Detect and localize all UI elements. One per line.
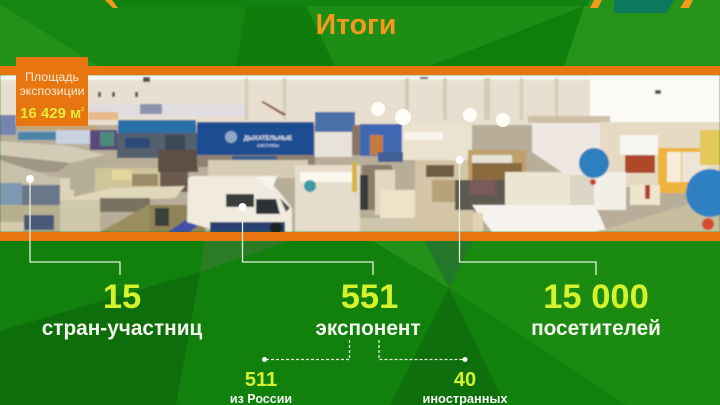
left upper booths: [88, 104, 245, 116]
stat: exhibitors: [315, 278, 421, 340]
right of centre: [415, 160, 473, 232]
sub-stat: from Russia: [230, 369, 292, 405]
title: Итоги: [316, 9, 396, 41]
banner: breathing systems: ДЫХАТЕЛЬНЫЕ: [244, 136, 292, 142]
stat: visitors: [531, 278, 661, 340]
balloons: [579, 148, 609, 178]
badge: exhibition area: [16, 57, 88, 126]
number 551: 551: [341, 278, 398, 316]
orange bars: [0, 66, 720, 75]
number 15 000: 15 000: [543, 278, 649, 316]
van: [187, 176, 292, 234]
stat: countries: [42, 278, 202, 340]
number 40: 40: [454, 369, 476, 391]
banner: breathing systems: системы: [257, 143, 279, 149]
badge value: 16 429 м2: [20, 105, 84, 122]
Rostelecom booth: [295, 162, 360, 232]
left booth rows: [0, 141, 105, 163]
sub-stat: foreign: [422, 369, 508, 405]
label countries: стран-участниц: [42, 317, 202, 340]
badge label: экспозиции: [19, 84, 85, 98]
right booths: [600, 122, 720, 187]
badge label: Площадь: [25, 70, 79, 84]
photo: exhibition hall: [0, 75, 720, 232]
banner: breathing systems: [197, 122, 314, 155]
hall wall: [0, 75, 590, 125]
badge label: [19, 70, 85, 98]
label exhibitors: экспонент: [315, 317, 421, 340]
number 15: 15: [103, 278, 141, 316]
label visitors: посетителей: [531, 317, 661, 340]
number 511: 511: [245, 369, 277, 391]
centre booths: [315, 112, 355, 132]
